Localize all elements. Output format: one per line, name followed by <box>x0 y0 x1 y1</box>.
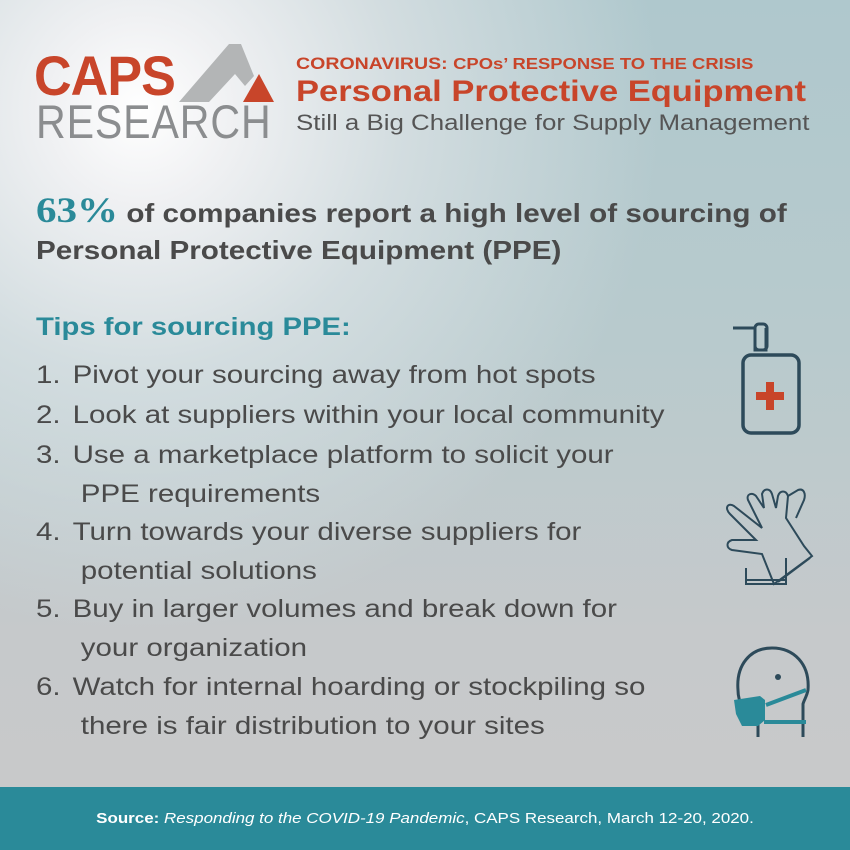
logo text CAPS: CAPS <box>34 44 175 107</box>
headline statistic <box>36 190 787 265</box>
tips list: 6. <box>36 673 61 701</box>
headline statistic: Personal Protective Equipment (PPE) <box>36 235 561 265</box>
logo text RESEARCH: RESEARCH <box>36 95 272 148</box>
header text: CORONAVIRUS: CPOs’ RESPONSE TO THE CRISIS <box>296 54 753 73</box>
footer source <box>0 787 850 850</box>
tips list: 4. <box>36 518 61 546</box>
tips list: 1. <box>36 361 61 389</box>
icon: face mask head <box>734 646 810 737</box>
tips list: Watch for internal hoarding or stockpiling so <box>73 673 645 701</box>
tips list <box>36 361 664 740</box>
tips list: potential solutions <box>81 556 317 584</box>
header text: Still a Big Challenge for Supply Management <box>296 110 809 135</box>
footer source: Source: Responding to the COVID-19 Pandemic, CAPS Research, March 12-20, 2020. <box>96 810 754 827</box>
tips list: Pivot your sourcing away from hot spots <box>73 361 596 389</box>
tips list: your organization <box>81 634 307 662</box>
header text: Personal Protective Equipment <box>296 75 806 108</box>
tips list: 5. <box>36 595 61 623</box>
tips list: Use a marketplace platform to solicit your <box>73 441 614 469</box>
tips list: 3. <box>36 441 61 469</box>
header text <box>296 54 810 135</box>
tips list: there is fair distribution to your sites <box>81 712 545 740</box>
icon: sanitizer bottle <box>733 322 801 435</box>
tips list: Buy in larger volumes and break down for <box>73 595 617 623</box>
logo <box>34 44 274 148</box>
logo mountain <box>179 44 274 102</box>
tips heading: Tips for sourcing PPE: <box>36 313 351 341</box>
tips list: 2. <box>36 401 61 429</box>
tips list: Look at suppliers within your local community <box>73 401 664 429</box>
tips list: PPE requirements <box>81 480 320 508</box>
headline statistic: 63% of companies report a high level of sourcing of <box>36 190 787 230</box>
icon: gloves <box>726 488 814 586</box>
tips list: Turn towards your diverse suppliers for <box>73 518 581 546</box>
